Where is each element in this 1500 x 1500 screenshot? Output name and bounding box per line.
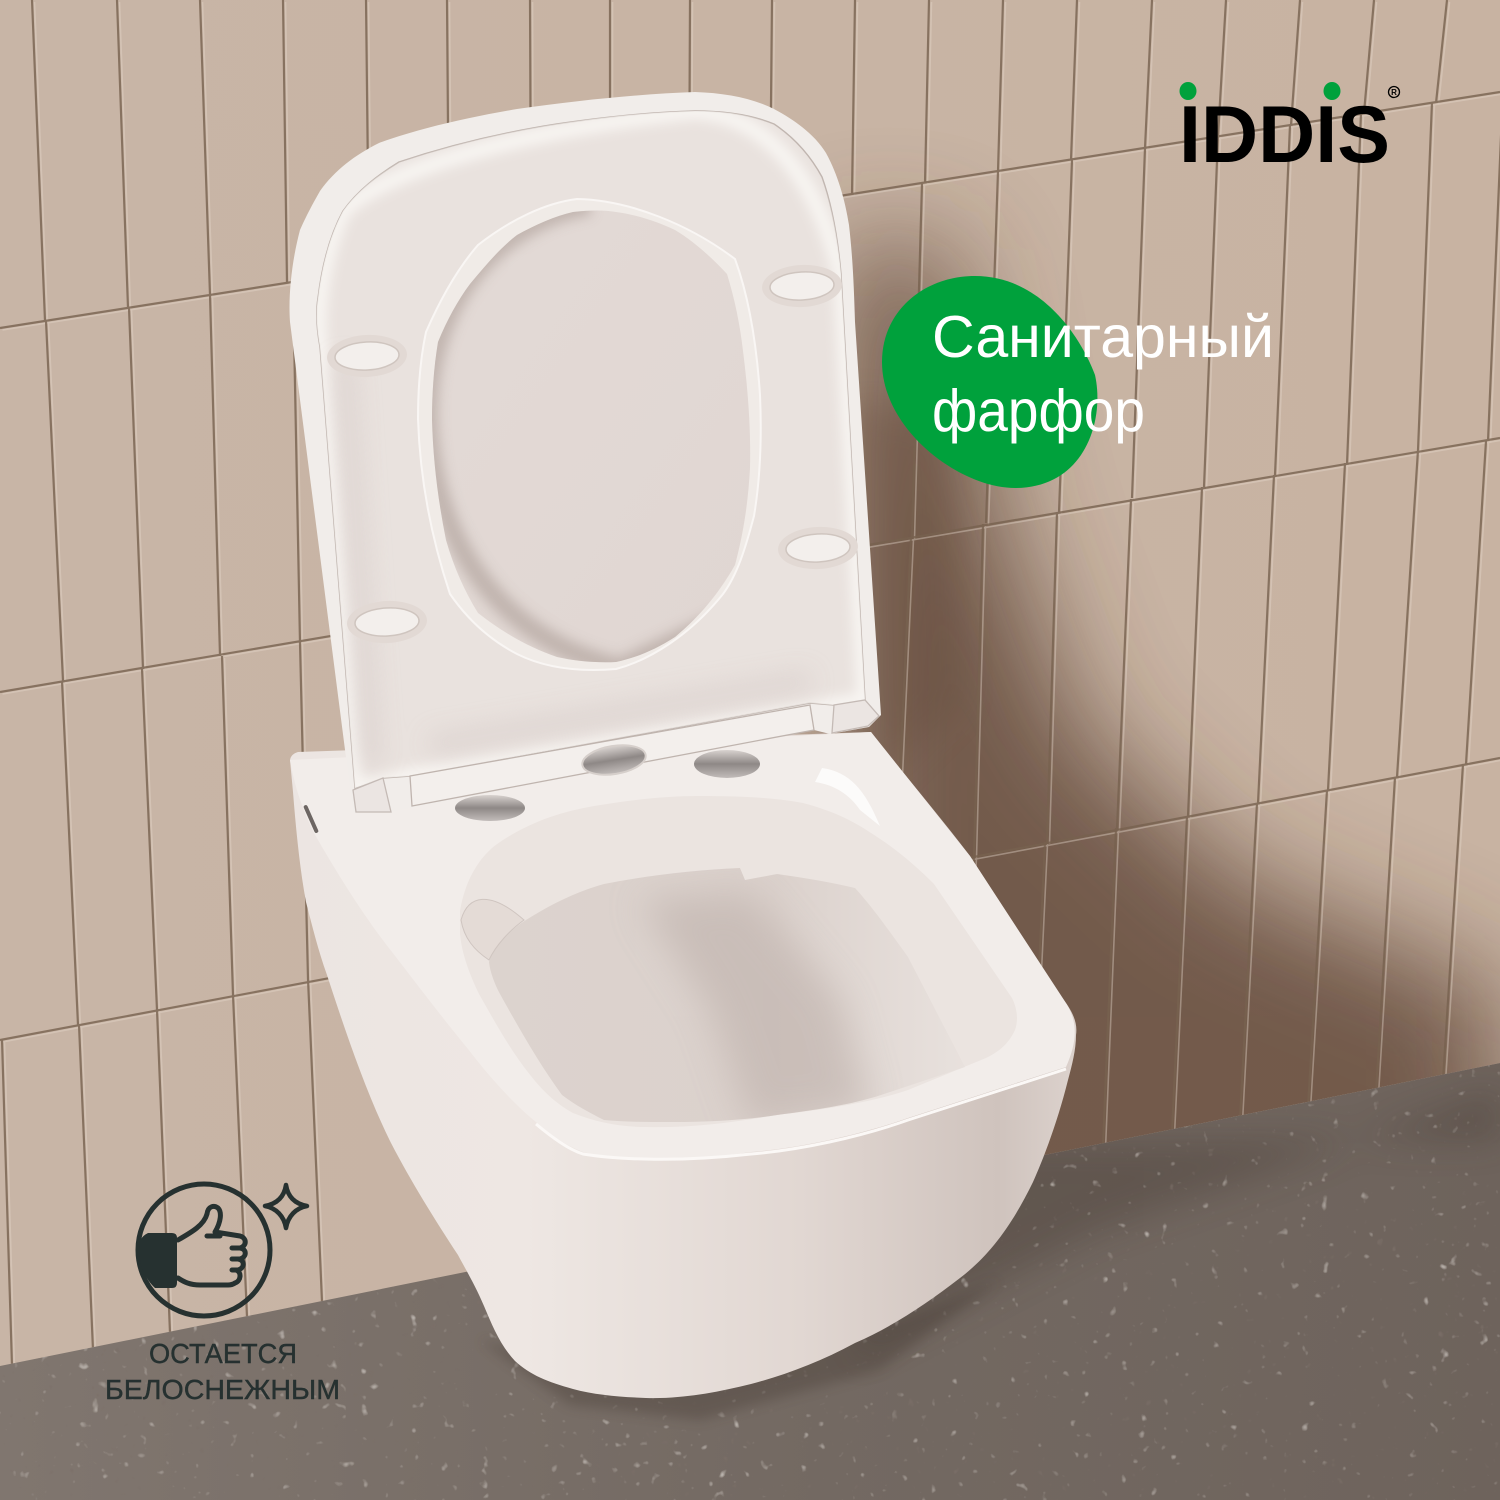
badge text line 1: ОСТАЕТСЯ [149, 1338, 297, 1369]
basin lip [460, 796, 1017, 1127]
rim top surface [290, 732, 1075, 1159]
icon: sparkle [265, 1185, 307, 1228]
toilet bowl [290, 732, 1076, 1420]
hinge strip [410, 705, 814, 806]
callout text line 1: Санитарный [932, 304, 1274, 370]
toilet lid [289, 92, 881, 812]
left chrome mount [455, 795, 525, 821]
left hinge [353, 778, 391, 812]
right hinge [832, 700, 879, 733]
basin shadow band [640, 890, 870, 1125]
registered mark [1388, 86, 1400, 98]
right chrome mount [694, 750, 760, 778]
bumper: upper right [761, 263, 843, 309]
panel edge shading [318, 111, 865, 788]
callout text line 2: фарфор [932, 378, 1145, 444]
lid inner panel [317, 111, 865, 788]
bumper: lower right [777, 525, 859, 571]
opening inner shadow [432, 210, 699, 662]
logo dot right [1324, 82, 1340, 100]
mark on the rim [303, 804, 319, 834]
bumper: upper left [326, 333, 408, 379]
rim front highlight [536, 1069, 1066, 1159]
seat opening [432, 210, 750, 662]
bowl body [290, 732, 1076, 1398]
panel: terrazzo floor [0, 1040, 1500, 1500]
logo dot left [1180, 82, 1196, 100]
lid outer shell [289, 92, 881, 812]
seat ring [418, 199, 761, 670]
basin interior [489, 868, 965, 1122]
logo wordmark: IDDIS [1179, 90, 1390, 180]
icon: thumb up in circle [138, 1184, 270, 1316]
rear surface shine [815, 768, 880, 826]
registered mark: R [1391, 88, 1397, 97]
logo: IDDIS [1179, 82, 1400, 180]
chrome button [580, 741, 648, 779]
glossy rim corner [461, 899, 524, 960]
green blob [882, 276, 1097, 488]
bumper: lower left [346, 599, 428, 645]
badge text line 2: БЕЛОСНЕЖНЫМ [105, 1374, 340, 1405]
bowl shadow on floor [480, 1280, 1000, 1420]
badge: stays snow-white [105, 1184, 340, 1405]
callout: sanitary porcelain [882, 276, 1274, 488]
